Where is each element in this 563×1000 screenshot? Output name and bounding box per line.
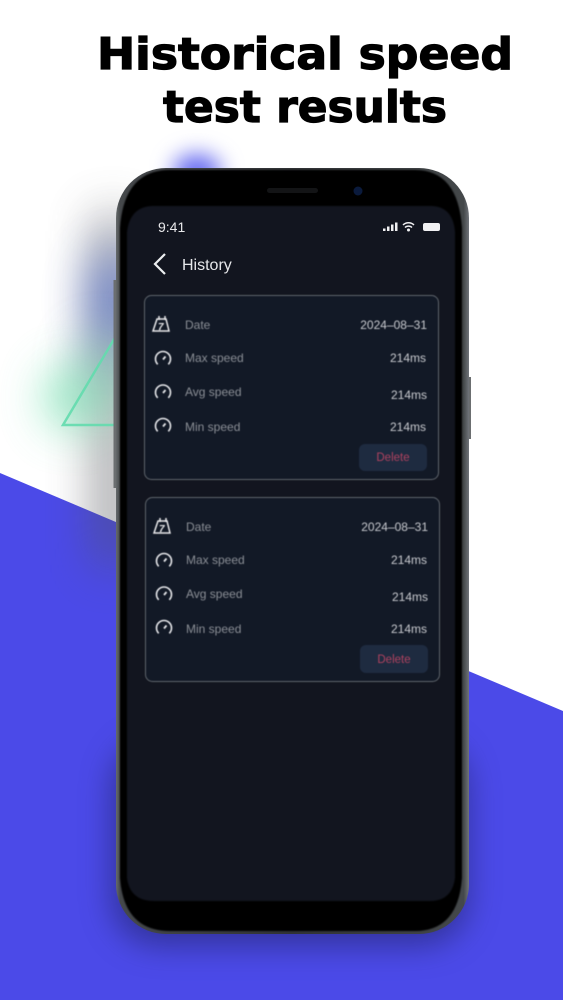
phone drop shadow	[112, 740, 468, 945]
gauge icon: min	[156, 418, 170, 431]
speaker	[267, 188, 318, 193]
gauge icon: max	[156, 351, 170, 364]
phone	[114, 168, 471, 934]
calendar icon: 7	[158, 322, 164, 333]
screen	[127, 206, 455, 901]
gauge icon: min	[157, 620, 172, 633]
card 2: 2024–08–31	[361, 520, 428, 534]
row: date: Date	[186, 520, 212, 534]
row: date: Date	[185, 318, 211, 332]
card 2: 214ms	[391, 553, 427, 567]
status bar time: 9:41	[158, 219, 185, 235]
card 2	[146, 498, 440, 682]
card 2: 214ms	[391, 622, 427, 636]
delete button	[359, 444, 427, 471]
black inner bezel	[120, 170, 462, 931]
gauge icon: max	[157, 553, 172, 566]
row: avg speed: Avg speed	[185, 385, 242, 399]
card 1: 214ms	[390, 351, 426, 365]
side buttons	[114, 280, 471, 488]
decorative green triangle	[63, 336, 118, 425]
card 1: 2024–08–31	[360, 318, 427, 332]
gauge icon: avg	[156, 385, 170, 398]
title	[97, 29, 513, 133]
screen heading: History	[182, 257, 232, 274]
delete button	[360, 645, 428, 673]
phone body	[116, 168, 469, 934]
card 1	[144, 296, 438, 480]
gauge icon: avg	[157, 587, 172, 600]
delete button: Delete	[377, 654, 411, 666]
calendar icon	[153, 316, 169, 333]
row: max speed: Max speed	[185, 351, 244, 365]
row: avg speed: Avg speed	[186, 587, 242, 601]
row: min speed: Min speed	[186, 622, 241, 636]
status bar icons	[383, 222, 440, 232]
card 1: 214ms	[390, 420, 426, 434]
title: test results	[163, 82, 447, 133]
row: min speed: Min speed	[185, 420, 240, 434]
title: Historical speed	[97, 29, 513, 80]
blurred glow behind phone	[46, 154, 221, 565]
camera	[354, 186, 362, 196]
calendar icon: 7	[159, 524, 165, 535]
blue diagonal background	[0, 473, 563, 1000]
delete button: Delete	[376, 452, 410, 464]
back arrow	[155, 254, 165, 274]
calendar icon	[154, 518, 170, 535]
card 1: 214ms	[391, 388, 427, 402]
card 2: 214ms	[392, 590, 428, 604]
row: max speed: Max speed	[186, 553, 245, 567]
